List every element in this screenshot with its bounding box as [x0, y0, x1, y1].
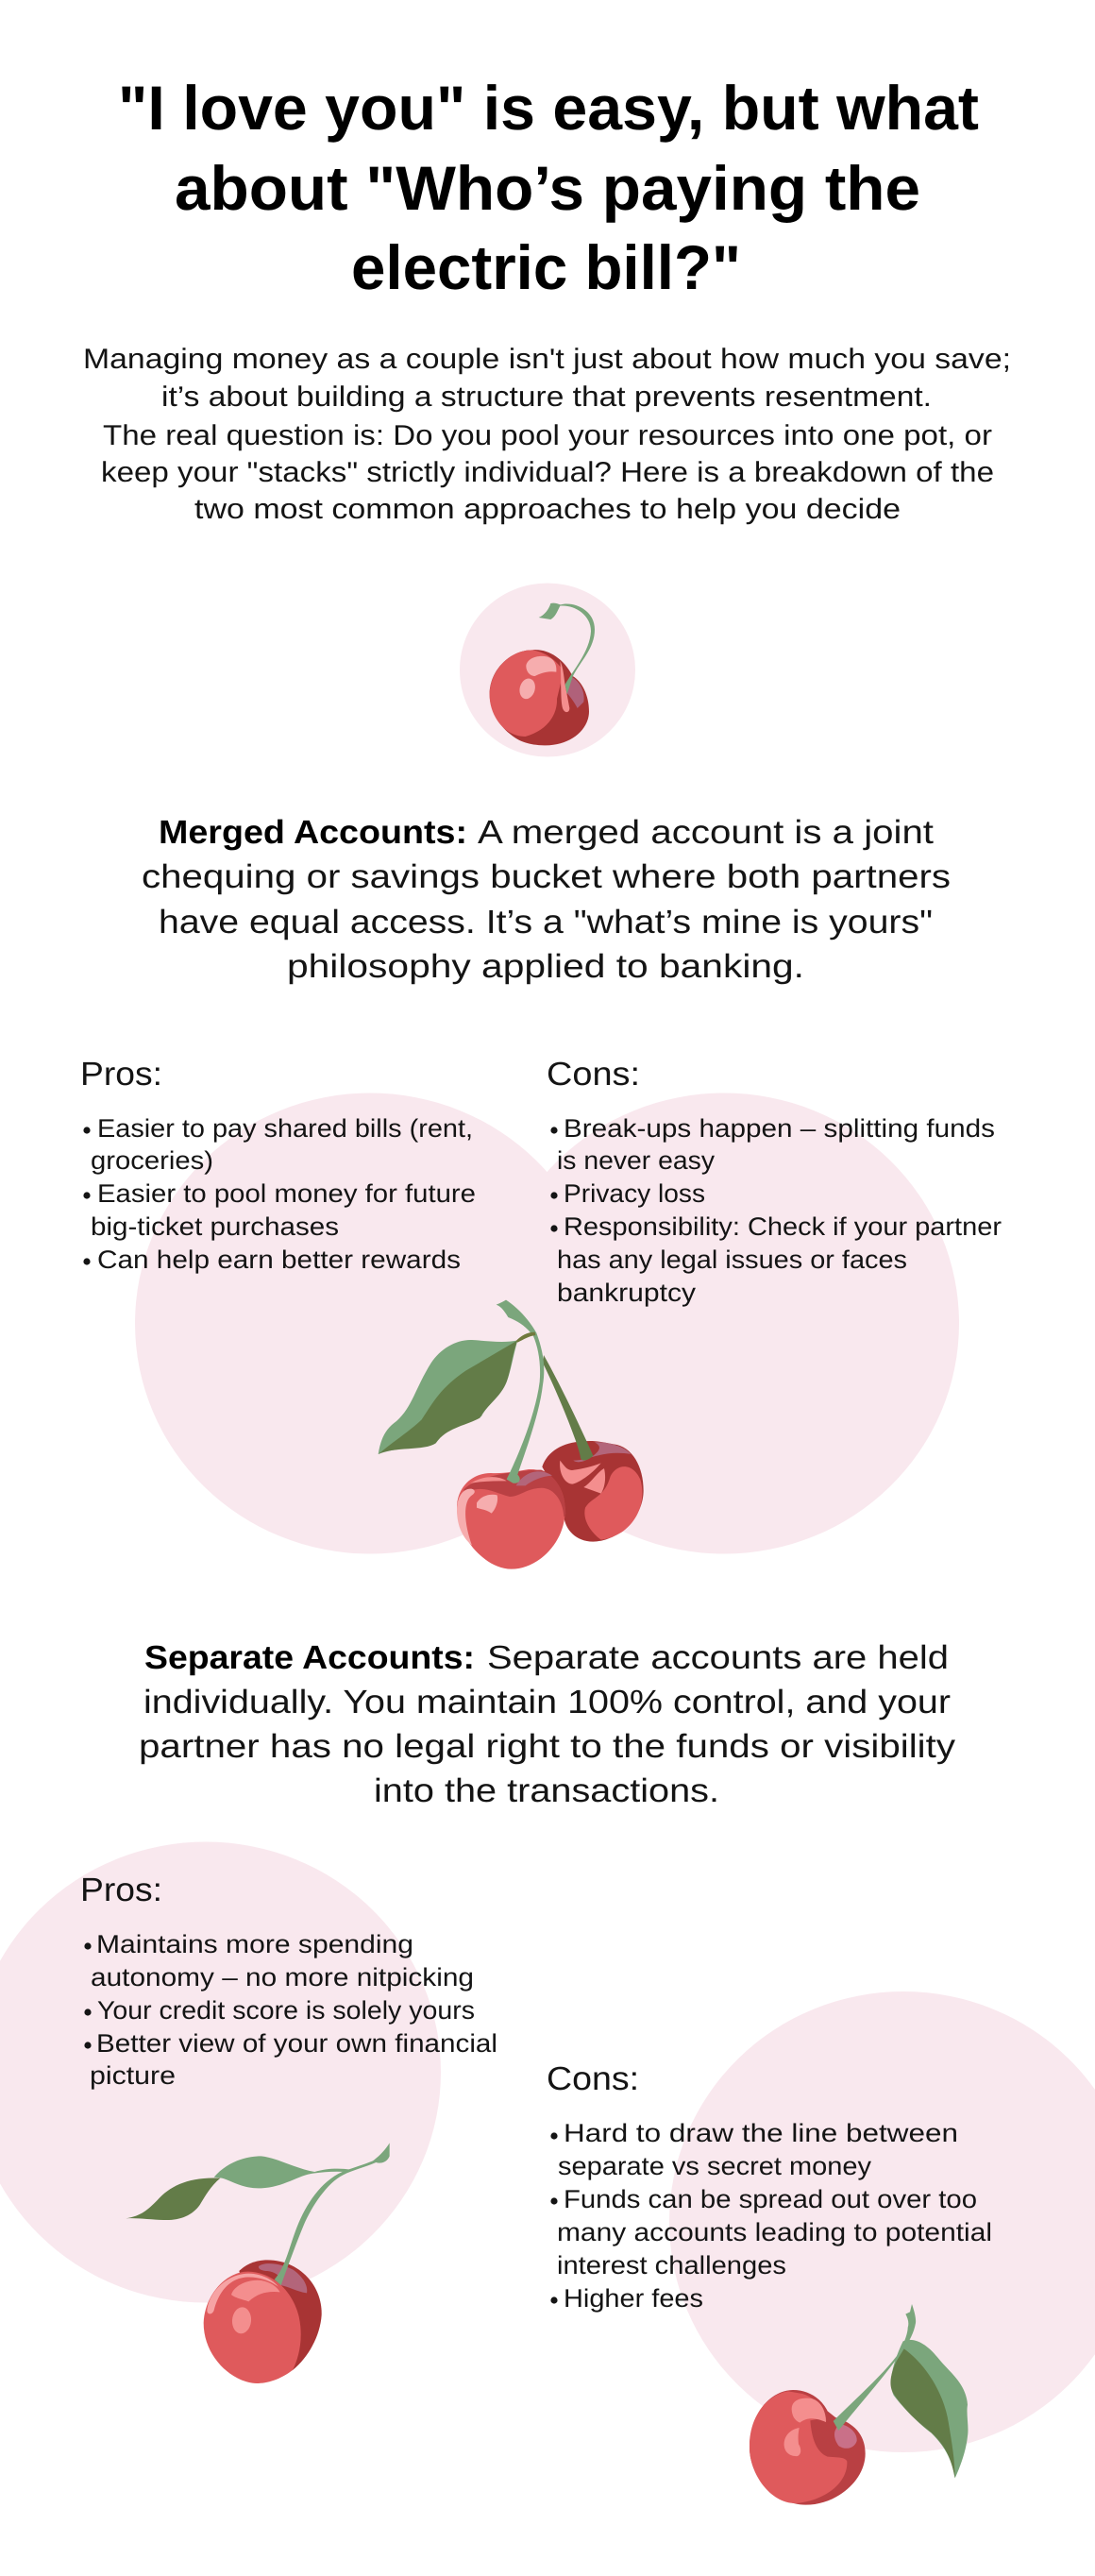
merged cons list: Privacy loss	[564, 1179, 705, 1208]
title: about "Who’s paying the	[175, 153, 920, 223]
separate accounts description: Separate Accounts:	[144, 1639, 475, 1676]
icon: cherry with two-tone leaf, left	[126, 2143, 390, 2383]
separate cons list	[547, 2060, 992, 2313]
separate pros list: Your credit score is solely yours	[97, 1996, 475, 2025]
panel: separate accounts background circles	[0, 1841, 1095, 2452]
intro text: Managing money as a couple isn't just about how much you save;	[83, 344, 1011, 375]
icon: two cherries with leaf	[379, 1300, 644, 1569]
separate pros list: autonomy – no more nitpicking	[91, 1963, 474, 1991]
title: "I love you" is easy, but what	[118, 73, 979, 143]
separate accounts description: partner has no legal right to the funds or visibility	[139, 1728, 956, 1765]
merged cons list: Cons:	[547, 1056, 640, 1093]
merged accounts description: chequing or savings bucket where both partners	[142, 858, 951, 895]
separate pros list: Maintains more spending	[96, 1930, 413, 1958]
merged cons list: Responsibility: Check if your partner	[564, 1212, 1002, 1241]
merged cons list: is never easy	[557, 1146, 716, 1175]
intro text: two most common approaches to help you decide	[194, 494, 901, 525]
separate pros list	[80, 1872, 497, 2090]
merged pros list: Can help earn better rewards	[97, 1246, 461, 1274]
separate cons list: Cons:	[547, 2060, 639, 2097]
intro text: keep your "stacks" strictly individual? Here is a breakdown of the	[101, 457, 994, 488]
merged accounts description	[142, 814, 951, 985]
separate pros list: picture	[90, 2061, 176, 2090]
merged accounts description: have equal access. It’s a "what’s mine is yours"	[159, 904, 933, 941]
separate cons list: Funds can be spread out over too	[564, 2185, 977, 2213]
merged pros list: Easier to pay shared bills (rent,	[97, 1114, 473, 1143]
merged cons list: Break-ups happen – splitting funds	[564, 1114, 995, 1143]
icon: single cherry in pink circle	[460, 584, 635, 757]
merged cons list: has any legal issues or faces	[557, 1246, 907, 1274]
merged cons list: bankruptcy	[557, 1279, 697, 1307]
icon: cherry with leaf, right	[750, 2304, 968, 2505]
separate pros list: Pros:	[80, 1872, 162, 1908]
merged pros list: Easier to pool money for future	[97, 1179, 476, 1208]
merged pros list: groceries)	[91, 1146, 213, 1175]
separate accounts description: individually. You maintain 100% control, and your	[143, 1684, 951, 1720]
panel: merged accounts background circles	[135, 1093, 959, 1554]
separate cons list: Higher fees	[564, 2284, 703, 2313]
intro text	[83, 344, 1011, 525]
merged accounts description: A merged account is a joint	[478, 814, 934, 851]
merged pros list	[80, 1056, 476, 1274]
separate accounts description: Separate accounts are held	[487, 1639, 949, 1676]
merged accounts description: philosophy applied to banking.	[287, 948, 804, 985]
merged accounts description: Merged Accounts:	[159, 814, 467, 851]
separate cons list: many accounts leading to potential	[557, 2218, 992, 2246]
merged pros list: big-ticket purchases	[91, 1212, 339, 1241]
title	[118, 73, 979, 302]
separate pros list: Better view of your own financial	[96, 2029, 497, 2058]
merged pros list: Pros:	[80, 1056, 162, 1093]
title: electric bill?"	[351, 232, 741, 302]
separate cons list: separate vs secret money	[558, 2152, 872, 2180]
separate accounts description	[139, 1639, 956, 1809]
intro text: The real question is: Do you pool your resources into one pot, or	[103, 420, 992, 451]
separate cons list: Hard to draw the line between	[564, 2119, 958, 2147]
separate accounts description: into the transactions.	[374, 1772, 719, 1809]
intro text: it’s about building a structure that prevents resentment.	[161, 381, 932, 413]
merged cons list	[547, 1056, 1002, 1307]
separate cons list: interest challenges	[557, 2251, 786, 2279]
